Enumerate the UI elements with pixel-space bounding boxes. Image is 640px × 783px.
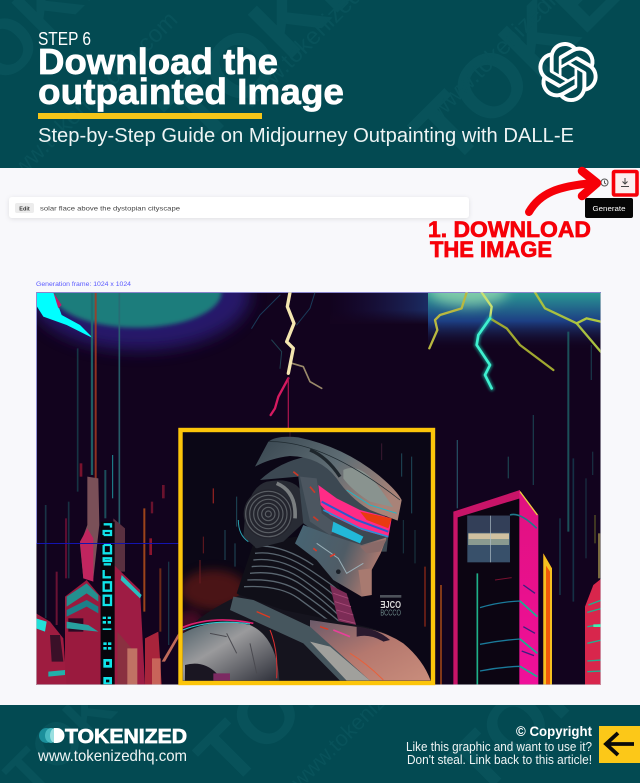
website: www.tokenizedhq.com	[37, 748, 187, 765]
sky glow right	[428, 293, 601, 342]
center lightning	[252, 292, 322, 428]
arrow: red pointing to download	[529, 171, 597, 212]
header banner: www.tokenizedhq.com	[0, 6, 183, 195]
window	[467, 516, 510, 562]
ear cup	[243, 480, 307, 548]
brand name: TOKENIZED	[65, 726, 187, 748]
icon: tokenized logo	[39, 728, 64, 743]
neck	[236, 568, 257, 600]
copyright text: Don't steal. Link back to this article!	[407, 753, 592, 767]
header banner	[0, 0, 640, 168]
red haze	[180, 570, 247, 610]
left city	[36, 292, 178, 685]
subtitle: Step-by-Step Guide on Midjourney Outpainting with DALL-E	[38, 125, 574, 147]
icon: history	[601, 179, 608, 186]
icon: download button highlighted	[614, 172, 637, 195]
icon: OpenAI logo	[538, 42, 598, 102]
right city	[441, 332, 602, 685]
outpainted image	[36, 292, 601, 685]
callout: download the image	[428, 217, 591, 262]
body	[183, 595, 391, 680]
tooltip: Generate: Generate	[592, 206, 626, 213]
title	[38, 41, 344, 112]
copyright heading: © Copyright	[516, 723, 592, 739]
copyright text: Like this graphic and want to use it?	[406, 740, 592, 754]
left shoulder pad	[183, 622, 279, 681]
prompt bar	[9, 197, 469, 218]
title: outpainted Image	[38, 71, 344, 112]
callout: download the image: THE IMAGE	[430, 237, 552, 262]
step label: STEP 6	[38, 29, 91, 49]
image edge	[36, 292, 600, 684]
sky glow left	[37, 293, 258, 359]
poster mark: ƎJCO	[380, 600, 401, 611]
yellow highlight frame	[180, 430, 433, 683]
strap	[230, 597, 370, 681]
frame seam	[36, 543, 178, 544]
visor	[318, 485, 392, 537]
right edge tower	[585, 578, 602, 685]
generation frame label: Generation frame: 1024 x 1024	[36, 281, 131, 288]
right shoulder	[310, 620, 431, 681]
jaw	[295, 525, 387, 597]
original image: robot in yellow frame	[173, 432, 431, 681]
poster mark	[380, 595, 401, 617]
helmet top	[255, 437, 402, 521]
side of head	[260, 457, 390, 552]
skyscraper	[458, 490, 524, 684]
poster mark: BCCCO	[380, 608, 401, 617]
title underline	[38, 113, 262, 119]
spire	[80, 477, 99, 578]
icon: back arrow	[599, 726, 640, 763]
footer banner	[0, 705, 640, 783]
orange tower	[543, 553, 552, 685]
right lightning	[429, 292, 601, 388]
copyright text	[406, 740, 592, 767]
title: Download the	[38, 41, 278, 82]
tower bases	[65, 580, 101, 685]
edit chip: Edit	[19, 206, 30, 212]
cyan sign tower	[101, 522, 115, 685]
callout: download the image: 1. DOWNLOAD	[428, 217, 591, 242]
edit chip	[15, 203, 34, 213]
prompt text: solar flace above the dystopian cityscape	[40, 206, 180, 212]
tooltip: Generate	[585, 198, 633, 218]
